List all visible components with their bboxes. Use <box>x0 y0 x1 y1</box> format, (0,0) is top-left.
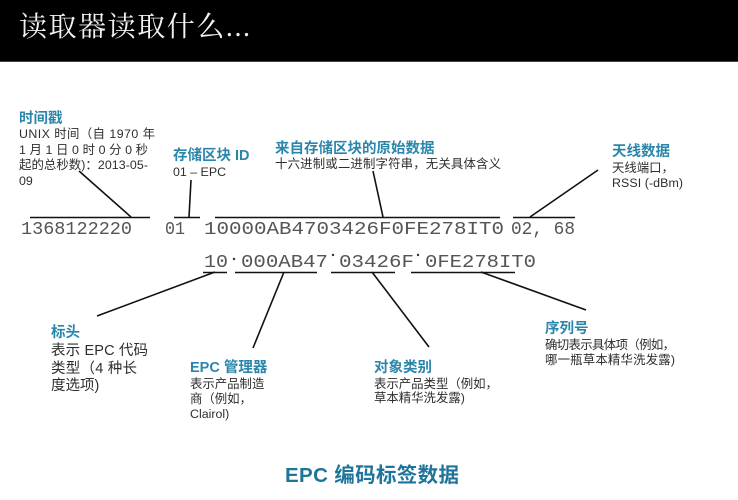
callout: header: 标头 <box>51 324 80 341</box>
raw reader data line: 01 <box>165 220 185 240</box>
callout: object class: 草本精华洗发露) <box>374 390 465 405</box>
callout: serial number: 序列号 <box>545 319 588 337</box>
callout: memory bank ID: 01 – EPC <box>173 165 226 179</box>
callout: timestamp: 09 <box>19 174 33 188</box>
title: 读取器读取什么... <box>19 11 250 43</box>
EPC breakdown line: 000AB47 <box>241 253 328 273</box>
EPC breakdown line: 10 <box>204 253 228 273</box>
callout: antenna data: 天线数据 <box>612 142 670 160</box>
callout: EPC manager: 商（例如， <box>190 391 252 406</box>
callout: object class: 表示产品类型（例如， <box>374 376 498 391</box>
callout: antenna data: 天线端口， <box>612 161 674 175</box>
callout: antenna data: RSSI (-dBm) <box>612 176 683 190</box>
callout: object class <box>372 272 498 405</box>
callout: raw data: 来自存储区块的原始数据 <box>275 139 434 157</box>
callout: EPC manager: EPC 管理器 <box>190 358 268 376</box>
callout: header: 类型（4 种长 <box>51 360 138 377</box>
callout: EPC manager <box>190 272 284 421</box>
raw reader data line: 1368122220 <box>21 220 132 240</box>
footer caption: EPC 编码标签数据 <box>285 463 459 487</box>
raw reader data line <box>21 218 575 240</box>
callout: timestamp: 时间戳 <box>19 110 63 127</box>
callout: timestamp: 起的总秒数)：2013-05- <box>19 157 148 172</box>
callout: timestamp: 1 月 1 日 0 时 0 分 0 秒 <box>19 143 148 157</box>
raw reader data line: 10000AB4703426F0FE278IT0 <box>204 220 504 240</box>
callout: timestamp: UNIX 时间（自 1970 年 <box>19 127 155 141</box>
callout: raw data <box>275 139 501 217</box>
EPC breakdown line <box>203 253 536 273</box>
callout: raw data: 十六进制或二进制字符串，无关具体含义 <box>275 156 501 171</box>
callout: serial number: 确切表示具体项（例如， <box>545 337 675 352</box>
header band <box>0 0 738 62</box>
EPC breakdown line: 0FE278IT0 <box>425 253 536 273</box>
callout: timestamp <box>19 110 155 217</box>
callout: EPC manager: 表示产品制造 <box>190 377 265 391</box>
raw reader data line: 02, 68 <box>511 220 575 240</box>
callout: memory bank ID: 存储区块 ID <box>173 146 250 164</box>
callout: header: 度选项) <box>51 377 99 394</box>
callout: object class: 对象类别 <box>374 358 432 376</box>
callout: EPC manager: Clairol) <box>190 407 229 421</box>
callout: serial number: 哪一瓶草本精华洗发露) <box>545 352 675 367</box>
callout: serial number <box>481 272 675 367</box>
callout: header <box>51 272 215 394</box>
callout: header: 表示 EPC 代码 <box>51 342 148 359</box>
callout: antenna data <box>530 142 683 217</box>
EPC breakdown line: 03426F <box>339 253 414 273</box>
callout: memory bank ID <box>173 146 250 217</box>
